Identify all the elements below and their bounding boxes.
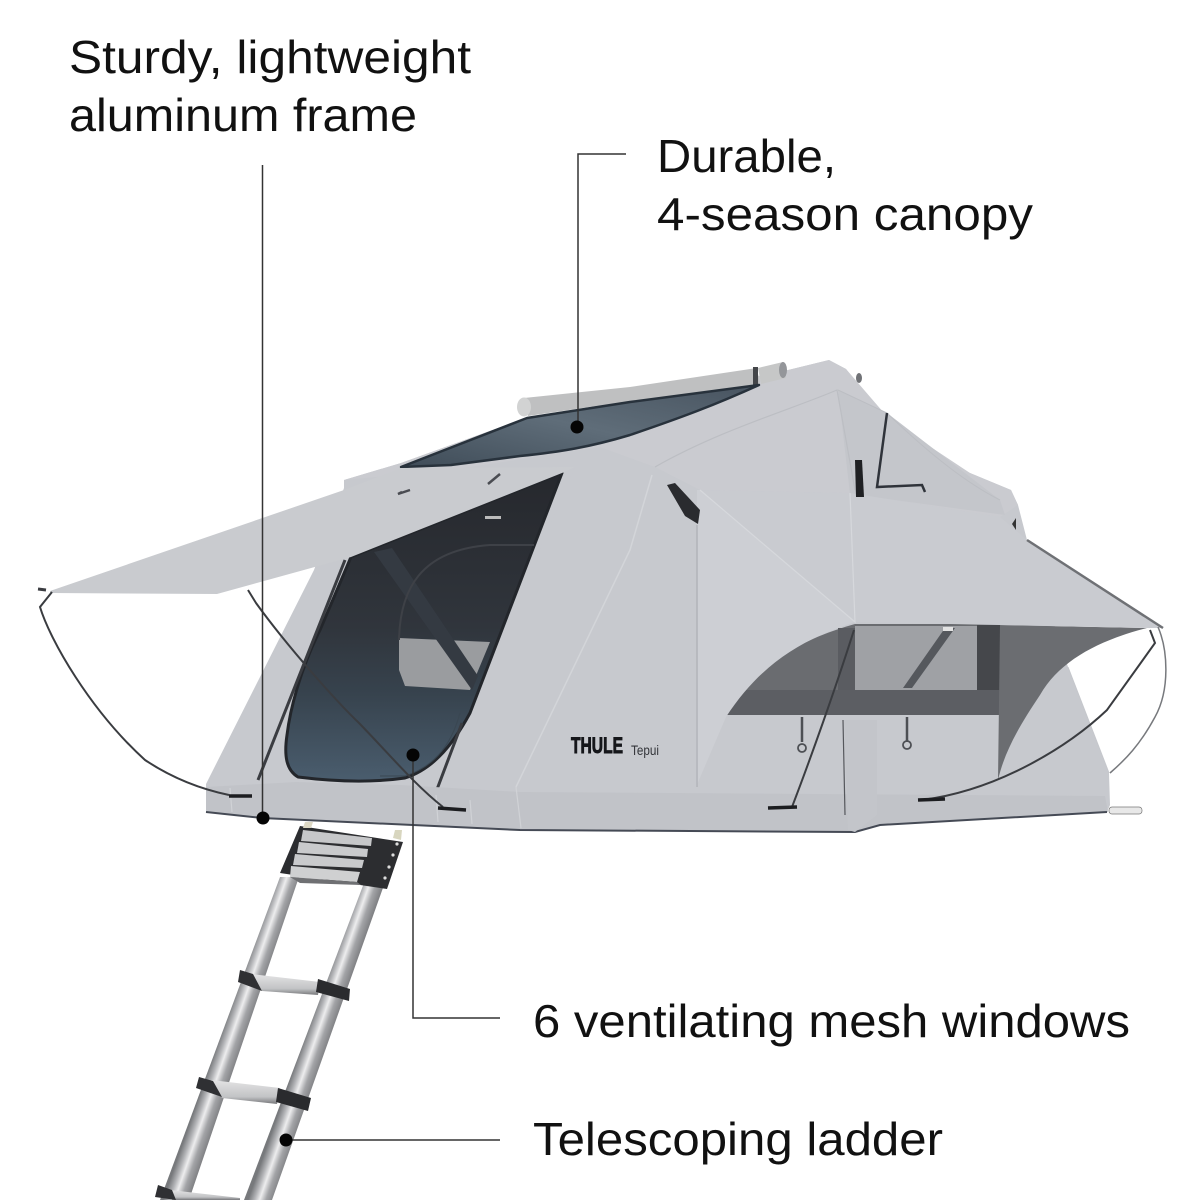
tube stake <box>1109 807 1142 814</box>
door flap <box>843 720 877 832</box>
door mesh window <box>286 473 562 781</box>
roof seams <box>655 390 855 490</box>
door awning <box>50 467 575 594</box>
door zipper straps <box>258 560 462 792</box>
bottom edge <box>206 812 1107 832</box>
side window interior <box>724 624 1054 715</box>
straps with rings <box>802 717 907 742</box>
logo: Thule: THULE <box>571 733 623 758</box>
callout: canopy: 4-season canopy <box>657 188 1033 240</box>
band seams <box>230 787 521 828</box>
callout: aluminum frame: Sturdy, lightweight <box>69 31 471 83</box>
interior diagonal strap <box>374 548 478 690</box>
ladder rung 3 <box>155 1185 240 1200</box>
panel seam <box>516 475 652 787</box>
side wing awning <box>696 490 1163 787</box>
ladder rung 2 <box>196 1077 311 1111</box>
skylight mesh window <box>401 385 759 467</box>
lower band <box>206 782 1108 832</box>
callout: canopy <box>570 130 1033 434</box>
callout: canopy: Durable, <box>657 130 836 182</box>
side roof shade <box>838 390 1005 515</box>
tent silhouette body <box>206 360 1110 832</box>
roof panel <box>344 360 1018 517</box>
callout: aluminum frame: aluminum frame <box>69 89 417 141</box>
ladder <box>155 822 403 1200</box>
ladder right rail <box>244 883 384 1200</box>
ladder top stacked rungs <box>280 822 403 889</box>
callout: ladder: Telescoping ladder <box>533 1113 943 1165</box>
interior tag <box>485 516 501 519</box>
front panel beside door <box>470 467 697 792</box>
callout: mesh windows <box>406 748 1130 1047</box>
rolled skylight cover <box>517 362 862 416</box>
ladder left rail <box>160 877 299 1200</box>
callout: mesh windows: 6 ventilating mesh windows <box>533 995 1130 1047</box>
ladder rung 1 <box>238 970 350 1001</box>
tent <box>38 360 1200 832</box>
guy lines <box>38 589 1166 807</box>
callout: ladder <box>280 1113 943 1165</box>
white gap next to wing <box>1068 630 1200 773</box>
logo: Thule: Tepui <box>631 742 659 758</box>
buckles and zip cord <box>667 413 1016 530</box>
interior arch <box>399 545 534 640</box>
callout: aluminum frame <box>69 31 471 824</box>
guy line tabs <box>229 796 945 810</box>
interior light pane <box>399 638 490 690</box>
side wing dark underside <box>998 625 1147 780</box>
